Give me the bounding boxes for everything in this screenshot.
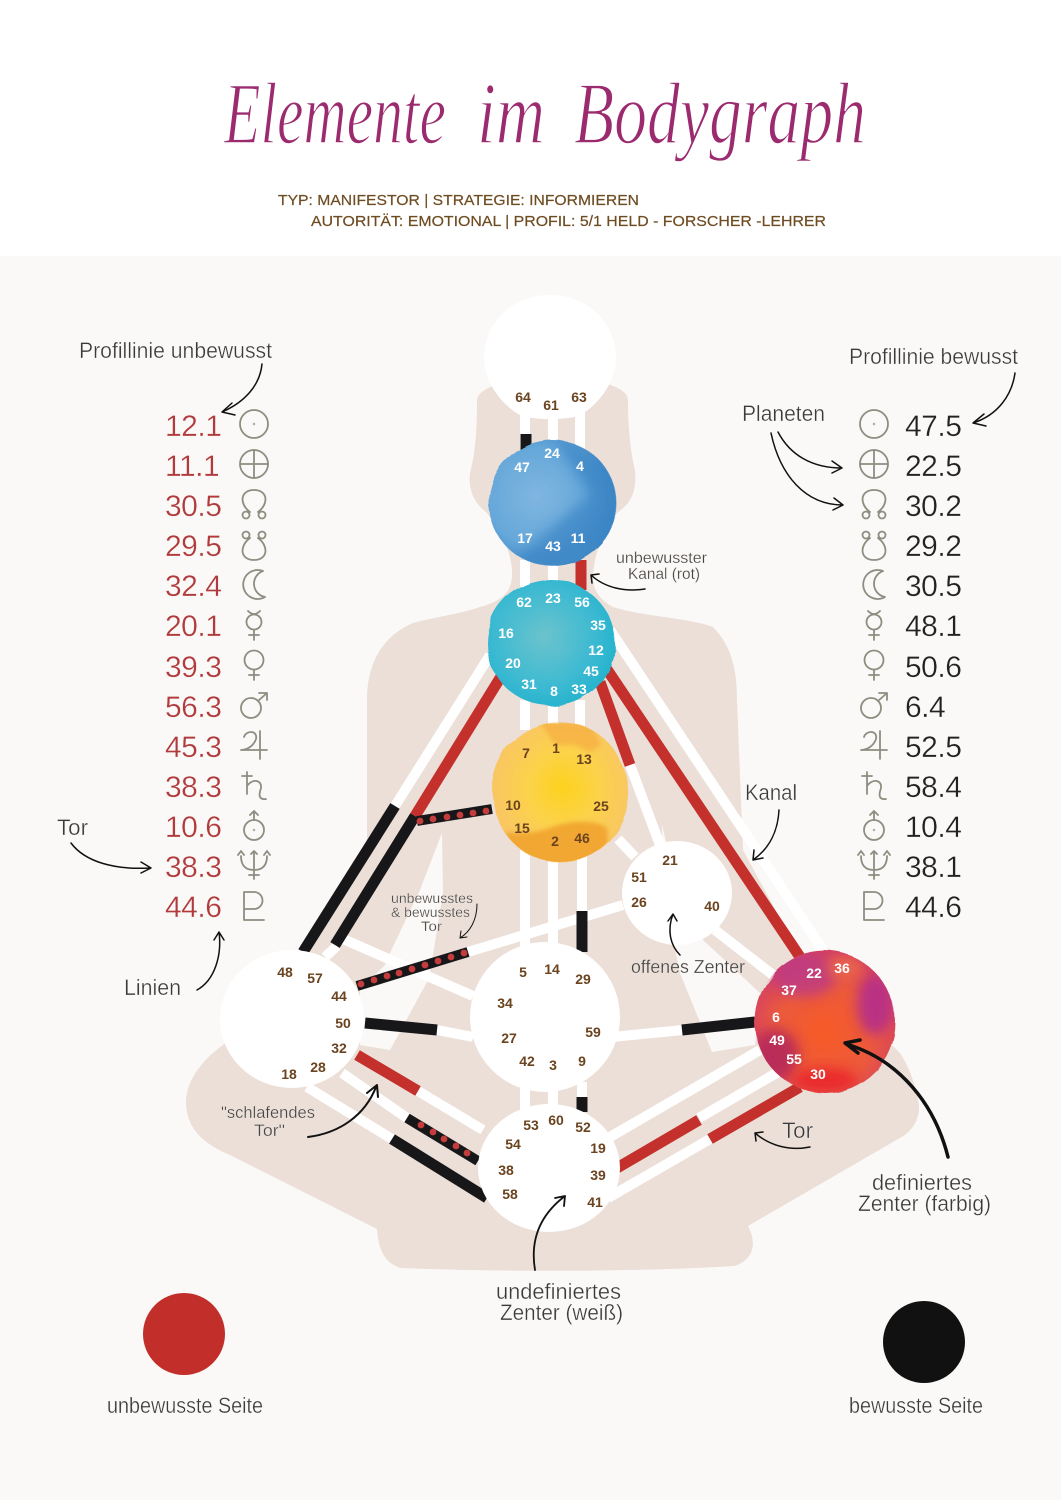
center: spleen (undefined): 32 (331, 1040, 347, 1056)
center: throat (teal): 56 (574, 594, 590, 610)
label: sleeping gate: Tor" (254, 1121, 285, 1140)
center: head (undefined): 61 (543, 397, 559, 413)
title (223, 66, 866, 163)
numbers: conscious column: 48.1 (905, 610, 961, 643)
label: unconscious and conscious gate: & bewusstes (391, 904, 470, 920)
numbers: conscious column: 47.5 (905, 410, 961, 443)
center: throat (teal): 8 (550, 683, 558, 699)
center: heart (open) (622, 841, 732, 945)
label: unconscious channel: Kanal (rot) (628, 566, 700, 583)
numbers: unconscious column (165, 410, 221, 924)
arrow: profile line conscious (973, 373, 1015, 426)
center: throat (teal): 31 (521, 676, 537, 692)
center: ajna (blue): 43 (545, 538, 561, 554)
center: root (undefined) (478, 1104, 620, 1232)
numbers: unconscious column: 29.5 (165, 530, 221, 563)
center: root (undefined): 38 (498, 1162, 514, 1178)
numbers: conscious column: 44.6 (905, 891, 961, 924)
center: G (yellow): 1 (552, 740, 560, 756)
center: root (undefined): 52 (575, 1119, 591, 1135)
center: head (undefined): 63 (571, 389, 587, 405)
arrow: profile line unconscious (222, 364, 262, 415)
center: heart (open): 26 (631, 894, 647, 910)
label: undefined center (496, 1279, 623, 1325)
planet symbols: left column (238, 410, 270, 920)
numbers: conscious column: 29.2 (905, 530, 961, 563)
center: sacral (undefined): 59 (585, 1024, 601, 1040)
arrow: sleeping gate (308, 1085, 378, 1137)
center: root (undefined): 53 (523, 1117, 539, 1133)
numbers: unconscious column: 38.3 (165, 771, 221, 804)
center: throat (teal) (487, 580, 615, 706)
numbers: conscious column: 22.5 (905, 450, 961, 483)
center: head (undefined) (484, 295, 616, 419)
label: unconscious channel (616, 550, 708, 583)
numbers: unconscious column: 10.6 (165, 811, 221, 844)
legend: unconscious side (107, 1293, 263, 1418)
numbers: conscious column: 30.5 (905, 570, 961, 603)
center: G (yellow): 2 (551, 833, 559, 849)
center: throat (teal): 12 (588, 642, 604, 658)
center: sacral (undefined): 3 (549, 1057, 557, 1073)
label: unconscious and conscious gate: Tor (421, 918, 442, 934)
center: root (undefined): 41 (587, 1194, 603, 1210)
center: solar plexus (red): 36 (834, 960, 850, 976)
title: Elemente (223, 66, 446, 163)
center: throat (teal): 35 (590, 617, 606, 633)
active channels (black and red) (303, 434, 800, 1198)
center: sacral (undefined): 14 (544, 961, 560, 977)
label: lines: Linien (124, 975, 181, 1000)
label: defined center: definiertes (872, 1170, 972, 1195)
numbers: unconscious column: 44.6 (165, 891, 221, 924)
center: sacral (undefined) (470, 942, 620, 1092)
subtitle: authority and profile: AUTORITÄT: EMOTIONAL | PROFIL: 5/1 HELD - FORSCHER -LEHRER (311, 213, 826, 230)
center: root (undefined): 58 (502, 1186, 518, 1202)
legend: conscious side (849, 1301, 983, 1418)
label: channel: Kanal (745, 780, 797, 805)
center: throat (teal): 16 (498, 625, 514, 641)
center: head (undefined): 64 (515, 389, 531, 405)
center: heart (open): 51 (631, 869, 647, 885)
numbers: conscious column: 30.2 (905, 490, 961, 523)
center: solar plexus (red): 22 (806, 965, 822, 981)
center: G (yellow) (492, 722, 628, 865)
arrows: planets (771, 432, 843, 510)
label: planets: Planeten (742, 401, 825, 426)
center: G (yellow): 46 (574, 830, 590, 846)
numbers: unconscious column: 56.3 (165, 691, 221, 724)
label: unconscious channel: unbewusster (616, 550, 708, 567)
center: heart (open): 40 (704, 898, 720, 914)
numbers: conscious column: 38.1 (905, 851, 961, 884)
arrow: unconscious channel (591, 574, 645, 590)
arrow: defined center (845, 1040, 948, 1157)
planet symbols: right column (858, 410, 890, 920)
arrow: undefined center (534, 1196, 565, 1270)
numbers: unconscious column: 30.5 (165, 490, 221, 523)
legend: unconscious side: unbewusste Seite (107, 1393, 263, 1418)
center: spleen (undefined): 18 (281, 1066, 297, 1082)
numbers: unconscious column: 45.3 (165, 731, 221, 764)
label: undefined center: undefiniertes (496, 1279, 621, 1304)
numbers: unconscious column: 11.1 (165, 450, 219, 483)
numbers: unconscious column: 38.3 (165, 851, 221, 884)
arrow: gate (left) (71, 843, 151, 873)
legend: conscious side: bewusste Seite (849, 1393, 983, 1418)
center: G (yellow): 25 (593, 798, 609, 814)
center: throat (teal): 45 (583, 663, 599, 679)
numbers: conscious column (905, 410, 961, 924)
center: sacral (undefined): 42 (519, 1053, 535, 1069)
center: solar plexus (red): 30 (810, 1066, 826, 1082)
center: throat (teal): 62 (516, 594, 532, 610)
center: throat (teal): 23 (545, 590, 561, 606)
label: open center: offenes Zenter (631, 957, 745, 977)
numbers: conscious column: 58.4 (905, 771, 961, 804)
center: ajna (blue): 24 (544, 445, 560, 461)
center: ajna (blue): 11 (571, 530, 586, 546)
numbers: unconscious column: 12.1 (165, 410, 221, 443)
center: solar plexus (red): 37 (781, 982, 797, 998)
numbers: conscious column: 6.4 (905, 691, 945, 724)
inactive channels (white) (307, 410, 823, 1198)
center: root (undefined): 19 (590, 1140, 606, 1156)
heading: profile line unconscious: Profillinie unbewusst (79, 338, 272, 363)
arrow: channel (753, 810, 779, 860)
arrow: gate (lower right) (755, 1132, 810, 1148)
numbers: conscious column: 50.6 (905, 651, 961, 684)
dotted channel 28-38 (407, 1118, 478, 1161)
numbers: conscious column: 10.4 (905, 811, 961, 844)
center: root (undefined): 39 (590, 1167, 606, 1183)
center: throat (teal): 20 (505, 655, 521, 671)
heading: profile line conscious: Profillinie bewusst (849, 344, 1018, 369)
arrow: open center (668, 914, 680, 955)
label: gate (left): Tor (57, 815, 88, 840)
center: solar plexus (red): 49 (769, 1032, 785, 1048)
numbers: unconscious column: 32.4 (165, 570, 221, 603)
center: G (yellow): 7 (522, 745, 530, 761)
center: ajna (blue): 47 (514, 459, 530, 475)
center: ajna (blue) (488, 440, 625, 570)
arrow: lines (197, 932, 224, 990)
label: undefined center: Zenter (weiß) (500, 1300, 623, 1325)
center: solar plexus (red) (751, 951, 895, 1093)
center: spleen (undefined): 44 (331, 988, 347, 1004)
center: spleen (undefined): 57 (307, 970, 323, 986)
arrow: unconscious and conscious gate (460, 904, 477, 938)
label: unconscious and conscious gate: unbewusstes (391, 890, 473, 906)
center: G (yellow): 10 (505, 797, 521, 813)
numbers: unconscious column: 20.1 (165, 610, 221, 643)
center: spleen (undefined): 28 (310, 1059, 326, 1075)
center: spleen (undefined): 48 (277, 964, 293, 980)
label: defined center: Zenter (farbig) (858, 1191, 991, 1216)
center: G (yellow): 13 (576, 751, 592, 767)
center: throat (teal): 33 (571, 681, 587, 697)
title: im (477, 66, 545, 163)
numbers: conscious column: 52.5 (905, 731, 961, 764)
center: sacral (undefined): 29 (575, 971, 591, 987)
label: sleeping gate: "schlafendes (221, 1103, 315, 1122)
subtitle: type and strategy: TYP: MANIFESTOR | STRATEGIE: INFORMIEREN (278, 192, 639, 209)
center: solar plexus (red): 55 (786, 1051, 802, 1067)
label: sleeping gate (221, 1103, 315, 1140)
center: spleen (undefined) (220, 950, 364, 1088)
center: sacral (undefined): 27 (501, 1030, 517, 1046)
numbers: unconscious column: 39.3 (165, 651, 221, 684)
dotted channel 44-26 (357, 950, 468, 987)
title: Bodygraph (574, 66, 866, 163)
center: root (undefined): 54 (505, 1136, 521, 1152)
center: solar plexus (red): 6 (772, 1009, 780, 1025)
label: defined center (858, 1170, 991, 1216)
center: sacral (undefined): 9 (578, 1053, 586, 1069)
center: sacral (undefined): 5 (519, 964, 527, 980)
label: gate (lower right): Tor (782, 1118, 813, 1143)
center: root (undefined): 60 (548, 1112, 564, 1128)
body silhouette (186, 378, 919, 1271)
label: unconscious and conscious gate (391, 890, 473, 934)
dotted channel 10 (417, 808, 492, 824)
center: sacral (undefined): 34 (497, 995, 513, 1011)
center: ajna (blue): 4 (576, 458, 584, 474)
center: heart (open): 21 (662, 852, 678, 868)
center: ajna (blue): 17 (517, 530, 533, 546)
center: G (yellow): 15 (514, 820, 530, 836)
center: spleen (undefined): 50 (335, 1015, 351, 1031)
